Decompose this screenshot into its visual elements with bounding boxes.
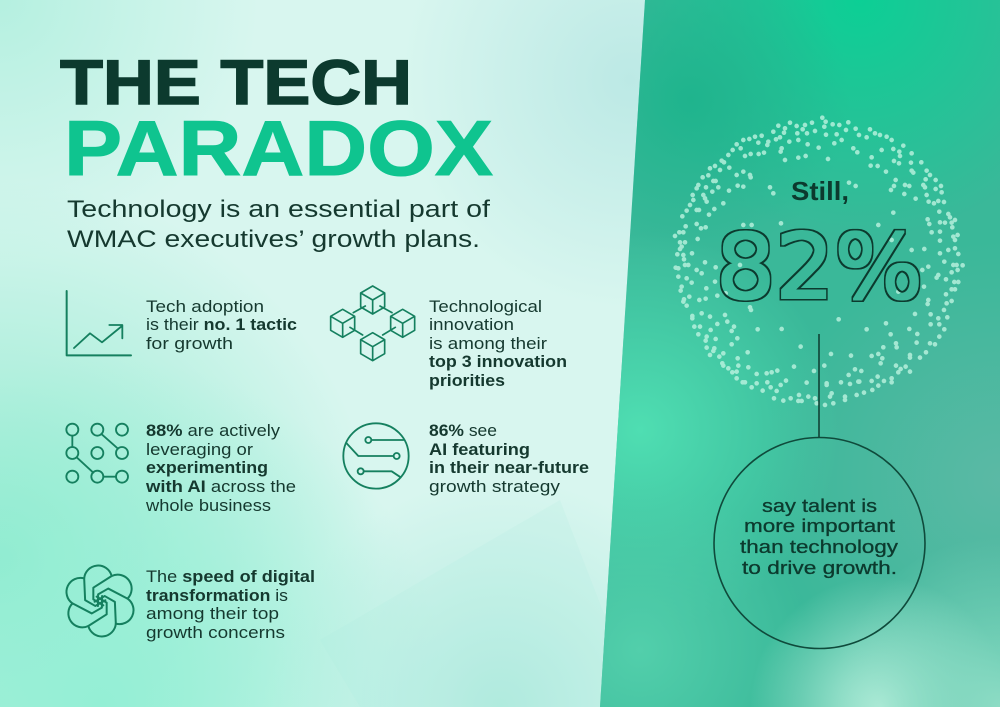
text: 88% AI: whole business [145,497,271,515]
text: 86% AI strategy [429,422,589,496]
text: speed of digital transformation: growth concerns [146,624,285,642]
text: technological innovation: is among their [429,335,548,353]
text: technological innovation: priorities [429,372,505,390]
text: 86% AI strategy: growth strategy [429,478,561,496]
subtitle: Technology is an essential part of [67,196,490,223]
callout: still: Still, [791,176,849,206]
text: technological innovation: innovation [429,316,514,334]
icon: connected cubes [331,286,415,361]
text: tech adoption [146,298,297,353]
text: speed of digital transformation: among their top [146,605,279,623]
text: 88% AI: experimenting [146,459,268,477]
connector line [818,334,820,438]
callout circle: say talent is [762,496,877,516]
icon: knot flower [61,566,139,636]
callout circle: more important [744,516,895,536]
subtitle: WMAC executives’ growth plans. [67,226,480,253]
text: technological innovation: top 3 innovation [429,353,567,371]
text: 88% AI [145,422,296,515]
callout circle [714,438,925,648]
subtitle [67,196,490,253]
text: 86% AI strategy: AI featuring [429,441,530,459]
text: technological innovation [429,298,567,390]
text: 86% AI strategy: in their near-future [429,459,589,477]
title: THE TECH [60,48,412,118]
text: technological innovation: Technological [429,298,542,316]
panel: right background [600,0,1000,707]
icon: circuit circle [343,423,409,489]
text: speed of digital transformation [146,568,315,642]
text: speed of digital transformation: The speed of digital [146,568,315,586]
text: tech adoption: is their no. 1 tactic [146,316,297,334]
text: 88% AI: with AI across the [145,478,296,496]
callout circle: than technology [740,537,898,557]
big number: 82%: 82% [716,215,923,320]
text: 88% AI: leveraging or [146,441,254,459]
text: tech adoption: Tech adoption [146,298,264,316]
icon: node network [66,424,128,483]
icon: growth chart [67,291,131,355]
text: 88% AI: 88% are actively [146,422,281,440]
text: 86% AI strategy: 86% see [429,422,497,440]
dot ring [675,118,963,405]
callout circle: to drive growth. [742,558,897,578]
text: tech adoption: for growth [146,335,233,353]
text: speed of digital transformation: transformation is [146,587,288,605]
title [60,48,493,192]
panel: left background [0,0,660,707]
title: PARADOX [64,104,493,192]
